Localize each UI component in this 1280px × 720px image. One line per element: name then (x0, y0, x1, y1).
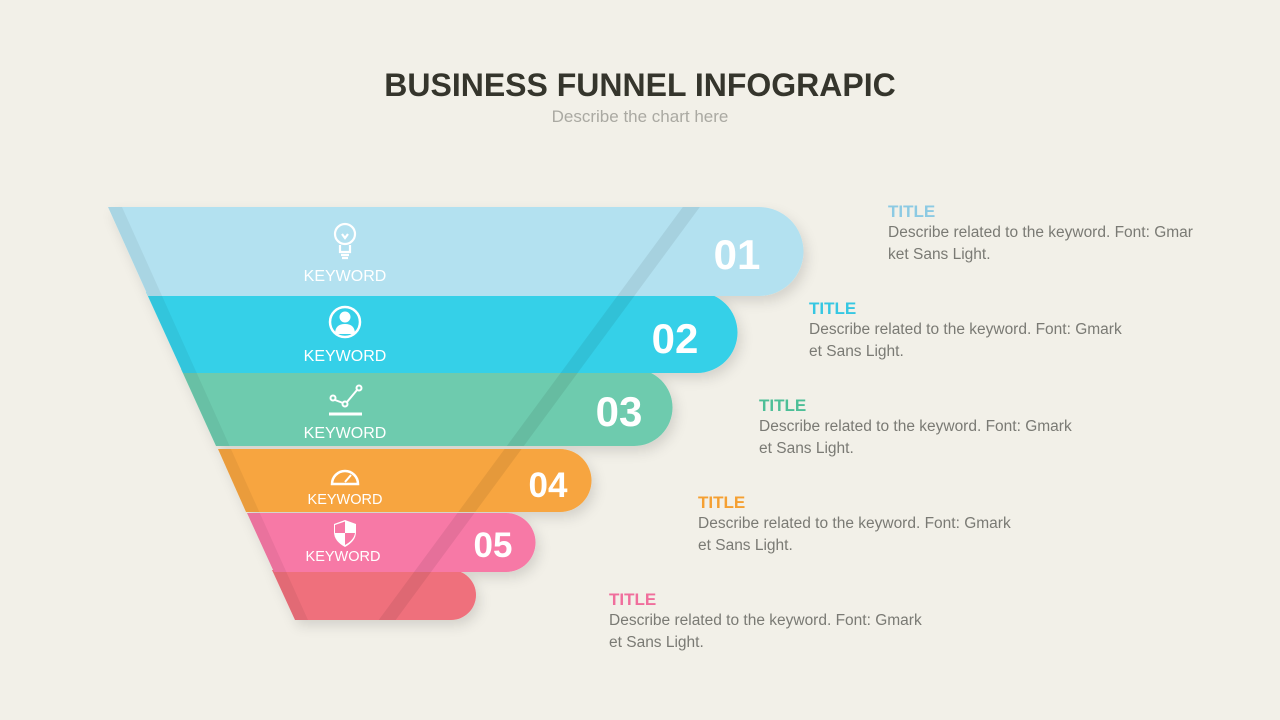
numbers (474, 231, 760, 565)
numbers: 05 (474, 526, 512, 565)
icon: people (330, 307, 360, 337)
diagonal strip (375, 200, 705, 625)
text block 1 (888, 202, 1193, 263)
numbers: 03 (596, 388, 642, 435)
keywords: KEYWORD (304, 348, 386, 365)
band 3 (181, 369, 672, 446)
icon: chart (329, 386, 362, 414)
text block 3: Describe related to the keyword. Font: Gmark (759, 418, 1072, 435)
text block 5 (609, 590, 922, 651)
numbers: 01 (714, 231, 760, 278)
band 5 (247, 513, 536, 572)
text block 5: et Sans Light. (609, 634, 704, 651)
icon: gauge (332, 471, 358, 484)
text block 4: TITLE (698, 493, 745, 512)
text block 2: TITLE (809, 299, 856, 318)
icon: bulb (335, 224, 355, 258)
text block 4: Describe related to the keyword. Font: Gmark (698, 515, 1011, 532)
band 1 (108, 207, 803, 296)
keywords: KEYWORD (304, 425, 386, 442)
icon: shield (334, 520, 356, 547)
keywords: KEYWORD (306, 549, 380, 565)
text block 4 (698, 493, 1011, 554)
text block 3: TITLE (759, 396, 806, 415)
title: BUSINESS FUNNEL INFOGRAPIC (384, 67, 896, 103)
left edge shading (108, 207, 308, 620)
text block 5: Describe related to the keyword. Font: Gmark (609, 612, 922, 629)
text block 5: TITLE (609, 590, 656, 609)
keywords: KEYWORD (304, 268, 386, 285)
keywords: KEYWORD (308, 492, 382, 508)
text block 2 (809, 299, 1122, 360)
band 2 (146, 292, 738, 373)
text block 3: et Sans Light. (759, 440, 854, 457)
text block 1: TITLE (888, 202, 935, 221)
band 4 (218, 449, 592, 512)
text block 3 (759, 396, 1072, 457)
text block 4: et Sans Light. (698, 537, 793, 554)
text block 1: Describe related to the keyword. Font: Gmar (888, 224, 1193, 241)
subtitle: Describe the chart here (552, 107, 728, 126)
numbers: 04 (529, 466, 568, 505)
keywords (304, 268, 386, 565)
text block 1: ket Sans Light. (888, 246, 991, 263)
band 6 (272, 570, 476, 620)
numbers: 02 (652, 315, 698, 362)
text block 2: et Sans Light. (809, 343, 904, 360)
funnel chart (108, 207, 810, 630)
text block 2: Describe related to the keyword. Font: Gmark (809, 321, 1122, 338)
